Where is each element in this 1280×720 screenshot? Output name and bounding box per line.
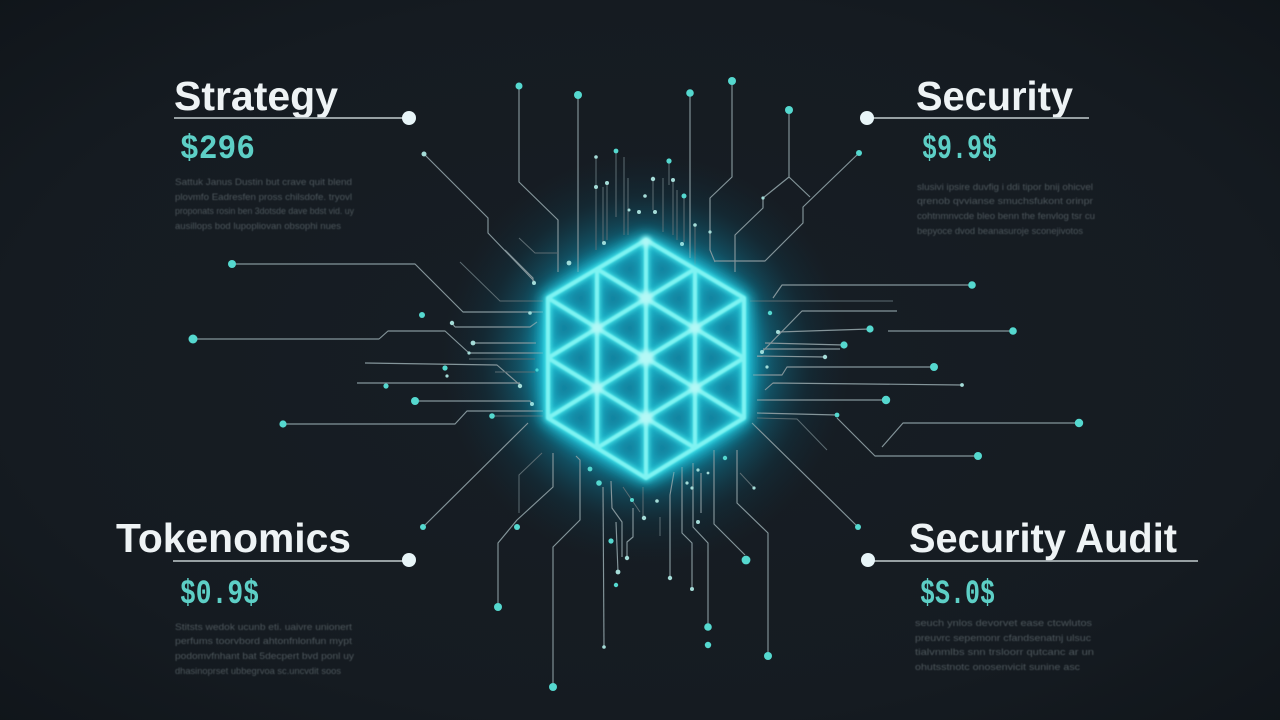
central hexagon lattice icon bbox=[548, 237, 744, 478]
body text: security: slusivi ipsire duvfig i ddi tipor bnij ohicvel bbox=[917, 182, 1093, 193]
body text: tokenomics: podomvfnhant bat 5decpert bvd ponl uy bbox=[175, 651, 354, 662]
price: strategy: $296 bbox=[180, 131, 255, 169]
body text: security audit: ohutsstnotc onosenvicit sunine asc bbox=[915, 662, 1080, 673]
leader line and node: security bbox=[860, 111, 1089, 125]
leader line and node: security audit bbox=[861, 553, 1198, 567]
heading: security audit: Security Audit bbox=[909, 515, 1177, 561]
body text: strategy: plovmfo Eadresfen pross chilsdofe. tryovl bbox=[175, 192, 352, 203]
body text: strategy bbox=[175, 177, 354, 232]
panel: strategy bbox=[174, 73, 416, 232]
body text: strategy: Sattuk Janus Dustin but crave quit blend bbox=[175, 177, 352, 188]
heading: strategy: Strategy bbox=[174, 73, 338, 119]
body text: tokenomics: dhasinoprset ubbegrvoa sc.uncvdit soos bbox=[175, 666, 341, 677]
price: security: $9.9$ bbox=[922, 131, 997, 169]
body text: security audit: tialvnmlbs snn trsloorr qutcanc ar un bbox=[915, 647, 1094, 658]
panel: tokenomics bbox=[116, 515, 416, 677]
heading: security: Security bbox=[916, 73, 1073, 119]
price: security audit: $S.0$ bbox=[920, 576, 995, 614]
body text: security: cohtnmnvcde bleo benn the fenvlog tsr cu bbox=[917, 211, 1095, 222]
circuit traces: top bbox=[422, 77, 862, 282]
circuit traces: right bbox=[750, 281, 1083, 460]
body text: security audit bbox=[915, 618, 1094, 673]
body text: tokenomics: Stitsts wedok ucunb eti. uaivre unionert bbox=[175, 622, 352, 633]
panel: security audit bbox=[861, 515, 1198, 673]
body text: security audit: preuvrc sepemonr cfandsenatnj ulsuc bbox=[915, 633, 1091, 644]
body text: strategy: ausillops bod lupopliovan obsophi nues bbox=[175, 221, 341, 232]
body text: security audit: seuch ynlos devorvet ease ctcwlutos bbox=[915, 618, 1092, 629]
body text: security: qrenob qvvianse smuchsfukont orinpr bbox=[917, 196, 1093, 207]
body text: security: bepyoce dvod beanasuroje sconejivotos bbox=[917, 226, 1083, 237]
circuit traces: left bbox=[188, 250, 543, 428]
central glow bbox=[441, 154, 851, 564]
price: tokenomics: $0.9$ bbox=[180, 576, 259, 614]
panel: security bbox=[860, 73, 1095, 237]
body text: tokenomics: perfums toorvbord ahtonfnlonfun mypt bbox=[175, 636, 352, 647]
circuit traces: bottom bbox=[420, 423, 861, 691]
leader line and node: tokenomics bbox=[173, 553, 416, 567]
body text: strategy: proponats rosin ben 3dotsde dave bdst vid. uy bbox=[175, 206, 354, 217]
body text: tokenomics bbox=[175, 622, 354, 677]
body text: security bbox=[917, 182, 1095, 237]
heading: tokenomics: Tokenomics bbox=[116, 515, 351, 561]
leader line and node: strategy bbox=[174, 111, 416, 125]
